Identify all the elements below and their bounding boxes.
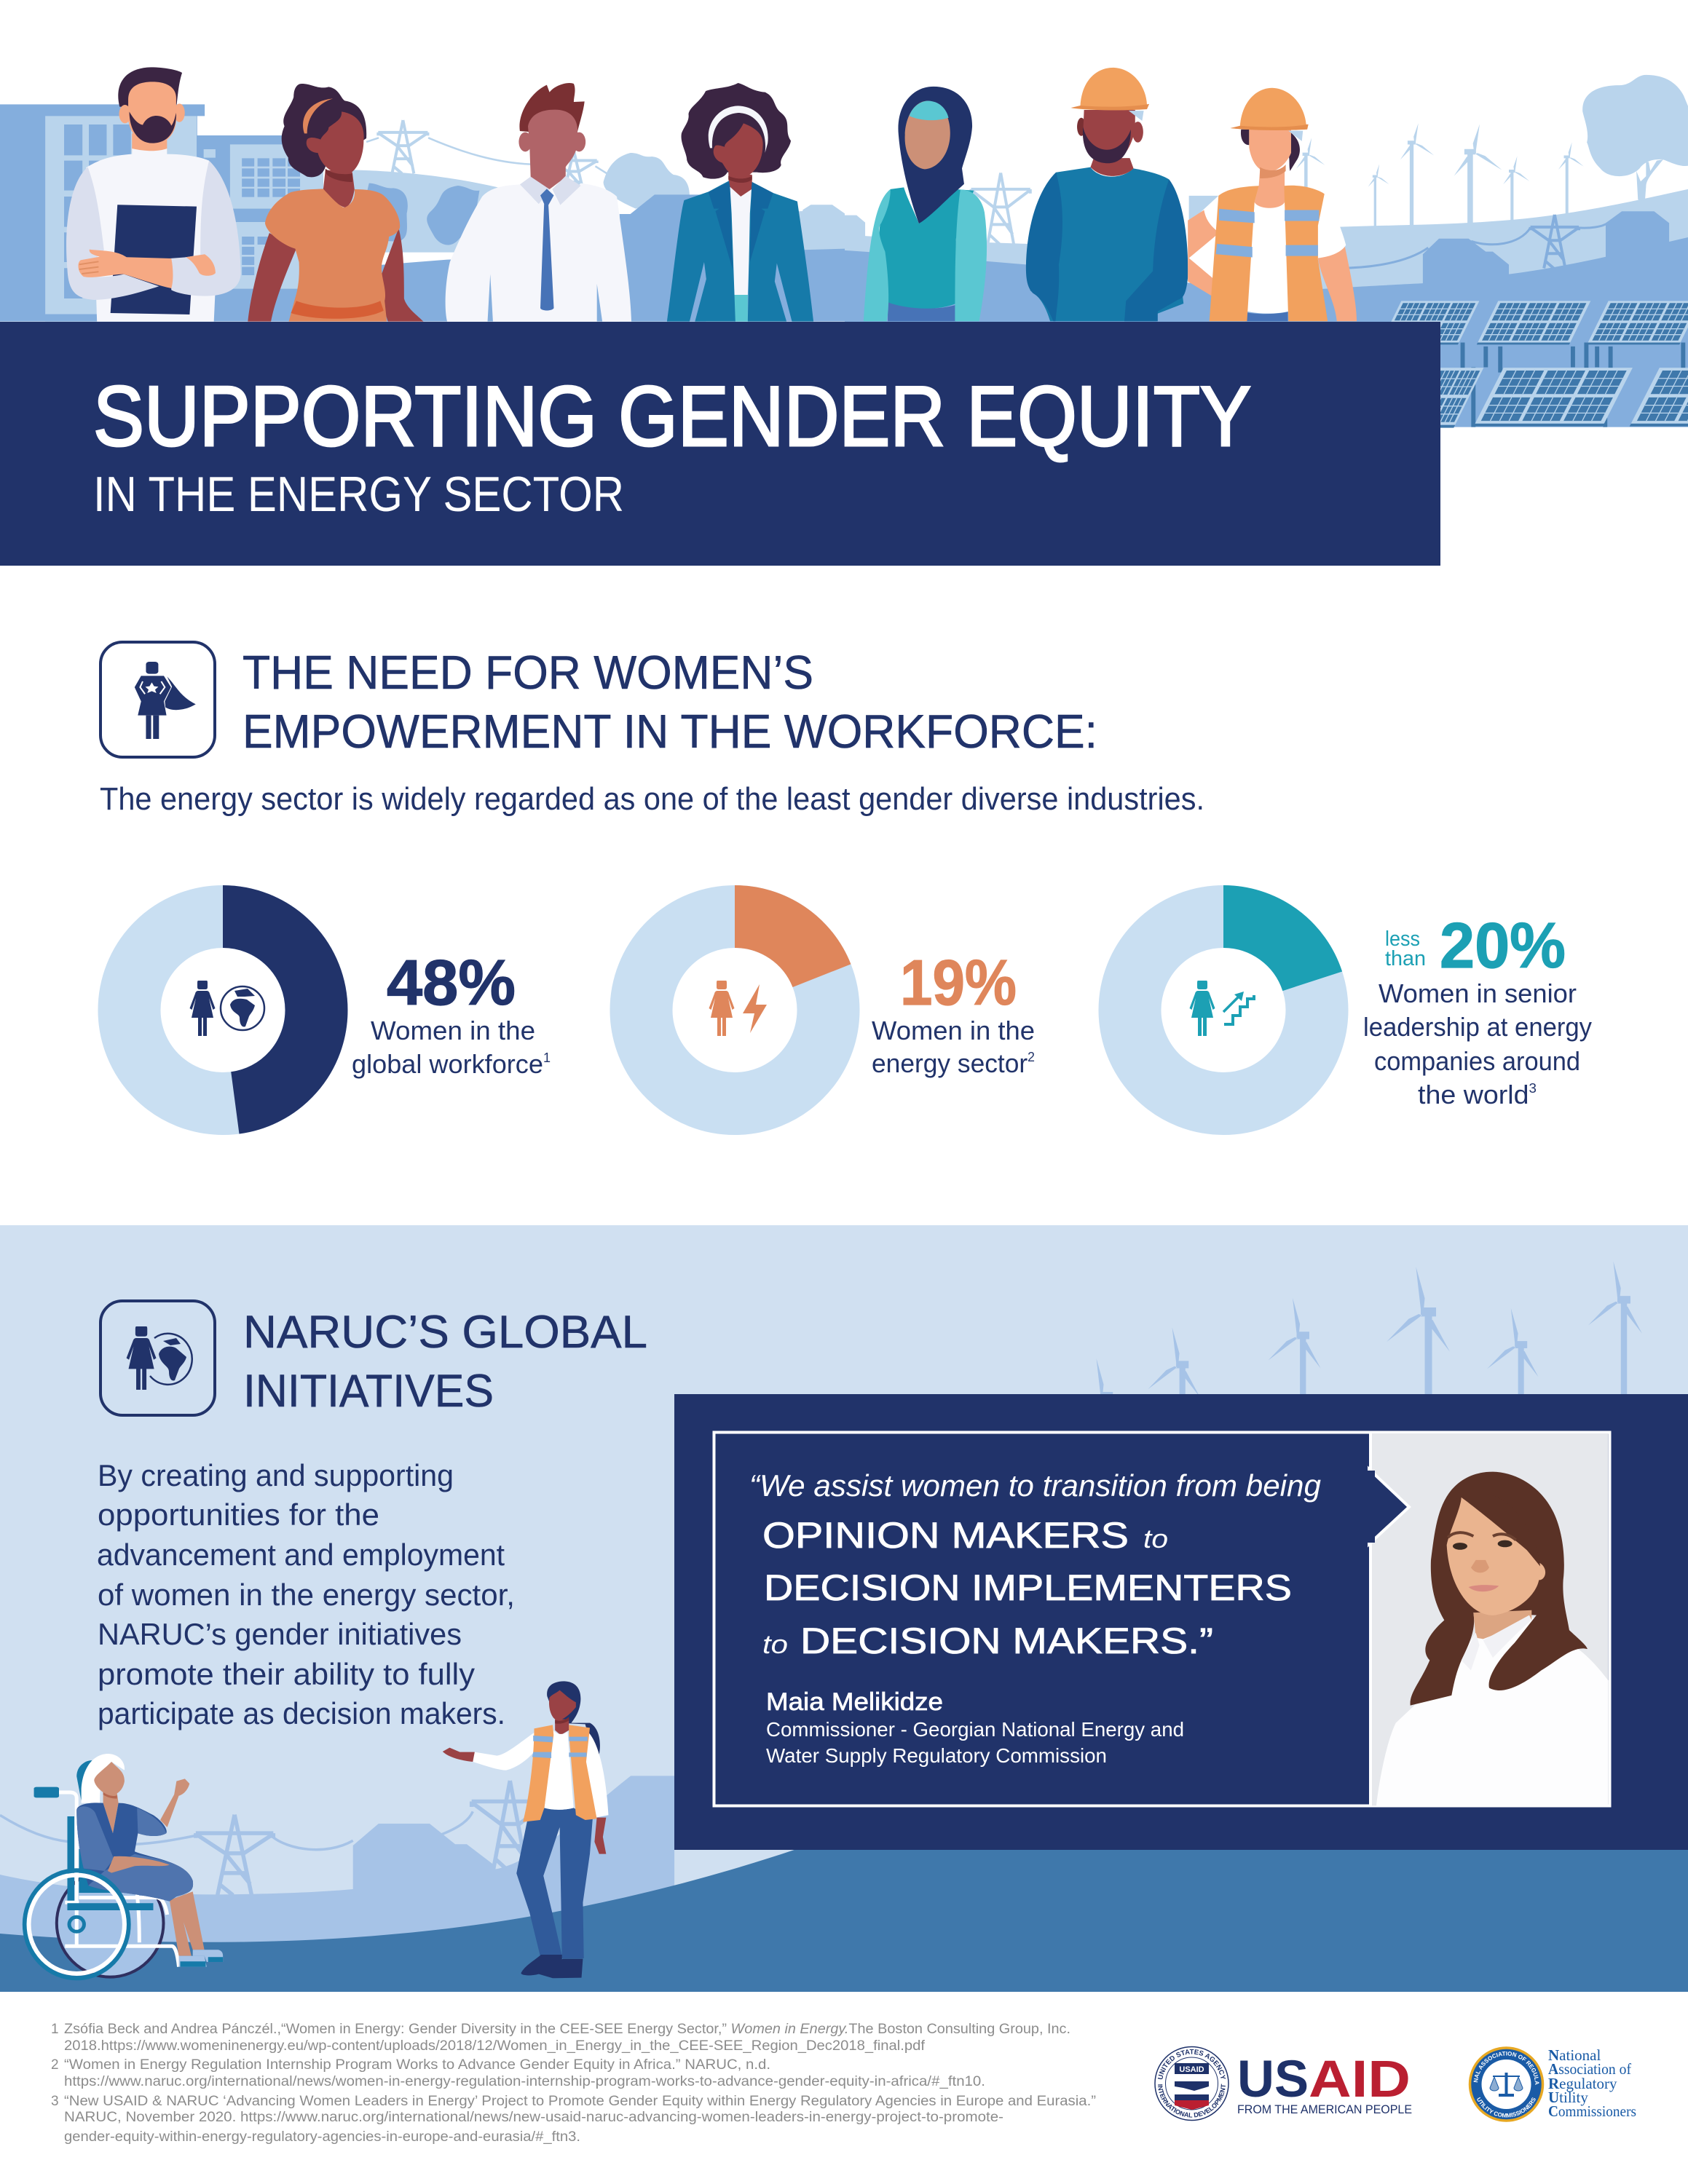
footnotes: 1 [51, 2022, 59, 2037]
donut chart: 19% energy sector [641, 917, 829, 1104]
person: woman in wheelchair [25, 1754, 223, 1978]
quote text: to [1143, 1524, 1168, 1554]
stat: 48% [352, 946, 551, 1079]
stat: less than 20%: less [1385, 927, 1420, 951]
footnotes: 3 [51, 2094, 59, 2109]
quote text: “We assist women to transition from being [749, 1468, 1321, 1503]
stat: 48%: 48% [387, 946, 516, 1018]
NARUC seal: UTILITY COMMISSIONERS [1477, 2097, 1536, 2118]
stat: less than 20%: than [1385, 947, 1426, 970]
footnotes: gender-equity-within-energy-regulatory-agencies-in-europe-and-eurasia/#_ftn3. [64, 2129, 580, 2145]
photo: Maia Melikidze [1371, 1433, 1608, 1805]
footnotes: NARUC, November 2020. https://www.naruc.org/international/news/new-usaid-naruc-advancing-women-leaders-in-energy-project-to-promote- [64, 2110, 1003, 2125]
footnotes [51, 2022, 1096, 2145]
wind turbines [1072, 1262, 1642, 1634]
NARUC wordmark: National [1548, 2046, 1601, 2064]
USAID wordmark: US [1237, 2051, 1309, 2108]
body text: of women in the energy sector, [98, 1578, 515, 1612]
footnotes: https://www.naruc.org/international/news/women-in-energy-regulation-internship-program-works-to-advance-gender-equity-in-africa/#_ftn10. [64, 2074, 985, 2089]
heading [243, 1307, 647, 1417]
USAID seal [1154, 2046, 1229, 2121]
person: man in white shirt with tie [446, 83, 631, 322]
person: man with folder [66, 67, 241, 322]
attribution: Maia Melikidze [766, 1688, 943, 1716]
heading: THE NEED FOR WOMEN’S [242, 646, 813, 699]
stat: 19%: energy sector [872, 1048, 1030, 1078]
attribution: Water Supply Regulatory Commission [766, 1744, 1107, 1767]
stat: 48%: 1 [543, 1051, 551, 1065]
stat: less than 20%: Women in senior [1379, 978, 1577, 1008]
header illustration [0, 67, 1688, 428]
USAID tagline: FROM THE AMERICAN PEOPLE [1237, 2102, 1412, 2116]
stat: 19%: 2 [1028, 1050, 1035, 1064]
NARUC wordmark: Regulatory [1548, 2075, 1617, 2092]
solar panels [1380, 301, 1688, 428]
footnotes: 2018.https://www.womeninenergy.eu/wp-content/uploads/2018/12/Women_in_Energy_in_the_CEE-SEE_Region_Dec2018_final.pdf [64, 2038, 926, 2054]
quote text: DECISION MAKERS.” [800, 1621, 1213, 1661]
icon: woman and stairs [1190, 981, 1254, 1036]
body text: opportunities for the [98, 1497, 379, 1532]
NARUC wordmark: Commissioners [1548, 2102, 1636, 2120]
body text: By creating and supporting [98, 1458, 454, 1492]
heading: INITIATIVES [243, 1366, 494, 1417]
landscape: hills, towers and houses [0, 1776, 1688, 1992]
quote text: to [762, 1629, 788, 1659]
stat: 48%: Women in the [371, 1016, 535, 1045]
footnotes: Zsófia Beck and Andrea Pánczél.,“Women in Energy: Gender Diversity in the CEE-SEE Energy Sector,” Women in Energy. The Boston Consulting Group, Inc. [64, 2022, 1070, 2037]
stat: less than 20%: leadership at energy [1363, 1012, 1592, 1042]
USAID seal: INTERNATIONAL DEVELOPMENT [1158, 2084, 1226, 2118]
body text: promote their ability to fully [98, 1657, 475, 1691]
stat: less than 20%: 3 [1529, 1081, 1537, 1096]
person: standing woman in safety vest [443, 1681, 609, 1978]
quote text: DECISION IMPLEMENTERS [764, 1567, 1292, 1608]
icon: woman and globe [189, 981, 264, 1036]
attribution [766, 1688, 1184, 1767]
stat: less than 20% [1363, 909, 1592, 1109]
title: SUPPORTING GENDER EQUITY [93, 368, 1251, 464]
person: bearded man in hard hat [1026, 68, 1188, 321]
panel: quote [674, 1394, 1688, 1850]
icon: woman and lightning bolt [709, 981, 767, 1036]
scenery: buildings and hills left [0, 104, 845, 322]
quote text [749, 1468, 1321, 1661]
person: woman in safety vest [1188, 88, 1357, 321]
person: woman in teal blazer [667, 83, 813, 322]
quote text: OPINION MAKERS [762, 1515, 1129, 1556]
icon: woman and globe [100, 1301, 215, 1415]
USAID seal: USAID [1179, 2065, 1204, 2074]
stat: less than 20%: the world [1418, 1080, 1524, 1109]
donut chart: 48% global workforce [130, 917, 316, 1104]
icon: superhero woman [100, 642, 215, 757]
intro text: The energy sector is widely regarded as one of the least gender diverse industries. [100, 781, 1204, 817]
USAID seal: UNITED STATES AGENCY [1158, 2049, 1226, 2079]
NARUC wordmark: Association of [1548, 2060, 1631, 2078]
title banner [0, 322, 1440, 566]
footnotes: 2 [51, 2057, 59, 2073]
panel: NARUC's global initiatives [0, 1225, 1688, 1992]
footnotes: “Women in Energy Regulation Internship Program Works to Advance Gender Equity in Africa.” NARUC, n.d. [64, 2057, 770, 2073]
NARUC wordmark [1548, 2046, 1636, 2120]
stat: less than 20%: 20% [1440, 909, 1566, 981]
subtitle: IN THE ENERGY SECTOR [93, 467, 624, 522]
logo: USAID: AID [1309, 2051, 1411, 2108]
quote pointer [1362, 1432, 1409, 1807]
heading [242, 646, 1097, 758]
attribution: Commissioner - Georgian National Energy and [766, 1718, 1184, 1741]
stat: less than 20%: companies around [1374, 1046, 1580, 1076]
scenery: wind turbines, hills and houses right [845, 75, 1688, 428]
stat: 19%: 19% [900, 946, 1017, 1018]
heading: NARUC’S GLOBAL [243, 1307, 647, 1358]
body text: advancement and employment [97, 1538, 505, 1572]
person: woman in orange dress [248, 84, 423, 322]
NARUC seal: NATIONAL ASSOCIATION OF REGULATORY [1474, 2052, 1539, 2085]
footnotes: “New USAID & NARUC ‘Advancing Women Leaders in Energy’ Project to Promote Gender Equity within Energy Regulatory Agencies in Europe and Eurasia.” [64, 2094, 1096, 2109]
donut chart: less than 20% senior leadership [1130, 917, 1317, 1104]
stat: 19%: Women in the [872, 1016, 1035, 1045]
stat: 19% [872, 946, 1035, 1078]
body text [97, 1458, 515, 1730]
section: need for women's empowerment [100, 642, 1204, 817]
heading: EMPOWERMENT IN THE WORKFORCE: [242, 705, 1097, 758]
logo: USAID [1154, 2046, 1412, 2121]
NARUC wordmark: Utility [1548, 2089, 1588, 2106]
body text: participate as decision makers. [98, 1696, 505, 1730]
body text: NARUC’s gender initiatives [98, 1617, 462, 1651]
person: woman in hijab [864, 87, 987, 321]
stat: 48%: global workforce [352, 1049, 543, 1079]
